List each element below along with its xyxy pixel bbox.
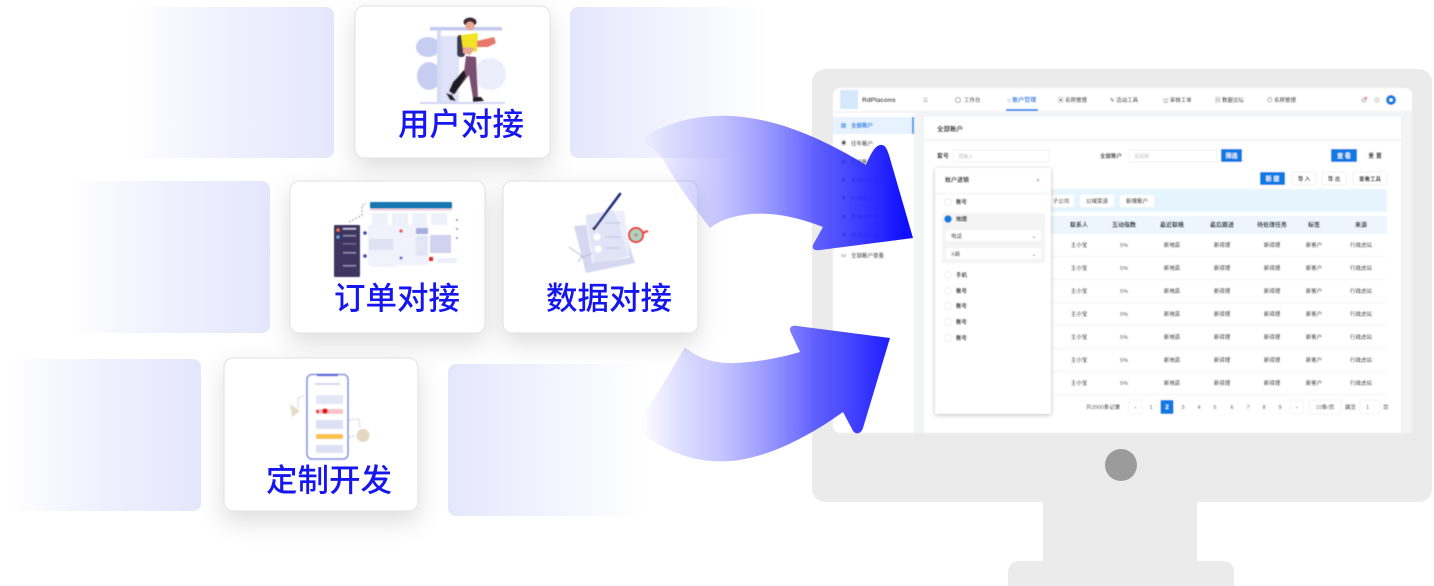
filter row: 筛选 [1225,152,1238,160]
filter row: 重 置 [1368,152,1382,160]
table rows: 主小宝 [1071,264,1088,272]
table header: 标签 [1308,221,1320,229]
sidebar: 费用进行中 [851,213,879,221]
table rows: 行政虎站 [1350,379,1372,387]
dropdown panel: ⌄ [1032,234,1036,240]
icon: mobile phone [290,374,370,459]
table rows: 新得理 [1214,379,1231,387]
monitor camera dot [1105,449,1137,481]
label: 订单对接: 订单对接 [334,280,460,316]
action buttons [1260,172,1387,185]
dropdown panel: 账号 [956,334,968,342]
table rows: 新地质 [1164,310,1181,318]
top navigation bar: ☰ [923,97,928,104]
table header: 最后跟进 [1210,221,1234,229]
table rows: 行政虎站 [1350,310,1372,318]
arrow: bottom [634,326,890,461]
panel heading: 全部账户 [937,124,963,133]
pagination: ‹ [1135,405,1137,411]
pagination: 5 [1213,405,1217,411]
tag band: 新增账户 [1126,197,1148,205]
table rows: 新客户 [1306,264,1322,272]
top navigation bar: ▣ 名称管理 [1058,96,1088,104]
dropdown panel: ⌄ [1032,252,1036,258]
filter row: 请输入 [958,153,973,160]
tag band: 公域渠道 [1086,197,1108,205]
table header: 互动指数 [1112,221,1136,229]
table rows: 新得理 [1264,241,1281,249]
dropdown panel: 账号 [956,198,968,206]
table rows: 新得理 [1264,333,1281,341]
table rows: 行政虎站 [1350,241,1372,249]
sidebar [833,113,914,433]
filter row: 套号 [937,152,949,160]
pagination: › [1296,405,1298,411]
pagination: 页 [1383,404,1389,411]
filter row: 查 看 [1337,152,1351,160]
table rows: 新地质 [1164,241,1181,249]
action buttons: 新 建 [1266,175,1279,183]
table rows: 新客户 [1306,333,1322,341]
table rows: 主小宝 [1071,310,1088,318]
table rows: 新得理 [1214,333,1231,341]
top navigation bar: ⌂ 账户管理 [1007,96,1036,104]
table rows: 5% [1120,335,1128,341]
top navigation bar [833,88,1412,111]
table header: 待处理任务 [1257,221,1287,229]
sidebar: 往年账户 [851,140,873,148]
sidebar: ◉ [841,140,847,147]
filter row [937,149,1382,162]
table rows: 主小宝 [1071,356,1088,364]
screen: dashboard [833,88,1412,433]
dropdown panel: 账户进销 [945,176,969,184]
table rows: 新得理 [1264,356,1281,364]
table rows: 主小宝 [1071,379,1088,387]
ghost panel: row 2 left [70,181,270,333]
table rows [937,241,1387,394]
table header: 联系人 [1070,221,1088,229]
table rows: 新得理 [1214,310,1231,318]
table rows: 主小宝 [1071,287,1088,295]
table rows: 新得理 [1264,310,1281,318]
card: 用户对接 [355,6,550,158]
table rows: 新得理 [1264,287,1281,295]
sidebar: 常用账户 [851,158,873,166]
table rows: 新地质 [1164,379,1181,387]
dropdown panel: 账号 [956,302,968,310]
table rows: 5% [1120,312,1128,318]
sidebar: ◉ [841,195,847,202]
pagination: 4 [1197,405,1201,411]
ghost panel: row 3 left [10,359,201,511]
table header: 最近联络 [1160,221,1184,229]
sidebar: ◉ [841,232,847,239]
sidebar: ▭ [841,253,847,259]
ghost panel: row 1 right [570,7,770,158]
top navigation bar: ◎ 名称管理 [1267,96,1297,104]
tag band: 子公司 [1053,198,1069,205]
pagination: 9 [1278,405,1282,411]
pagination: 共2000条记录 [1086,403,1121,411]
action buttons: 导 出 [1328,175,1340,183]
label: 定制开发: 定制开发 [266,462,392,498]
top navigation bar: RdPlacons [862,97,896,104]
pagination [1086,400,1389,414]
table rows: 新得理 [1264,264,1281,272]
arrow: top [640,116,913,250]
table rows: 新地质 [1164,356,1181,364]
pagination: 1 [1366,405,1369,411]
monitor stand [1043,500,1197,563]
monitor body [812,69,1432,502]
sidebar: 全部账户 [851,122,873,130]
action buttons: 导 入 [1298,176,1311,183]
table rows: 新客户 [1306,241,1322,249]
monitor [812,69,1432,586]
table rows: 新客户 [1306,379,1322,387]
dropdown panel: 手机 [956,271,968,279]
dropdown panel [935,168,1051,414]
sidebar: ◉ [841,214,847,221]
table rows: 新得理 [1214,241,1231,249]
table rows: 新地质 [1164,333,1181,341]
dropdown panel: 账号 [956,287,968,295]
table rows: 新客户 [1306,287,1322,295]
sidebar: 费用进行中 [851,232,879,240]
label: 用户对接: 用户对接 [398,106,524,142]
sidebar: ◉ [841,159,847,166]
pagination: 10条/页 [1316,403,1335,411]
top navigation bar: ▤ 数据论坛 [1215,96,1245,104]
sidebar: ◉ [841,177,847,184]
sidebar: 全部账户查看 [851,252,885,260]
dropdown panel: 地理 [956,215,968,223]
table rows: 5% [1120,381,1128,387]
pagination: 8 [1262,405,1266,411]
pagination: 6 [1230,405,1234,411]
pagination: 跳至 [1345,403,1357,411]
table rows: 新得理 [1214,264,1231,272]
icon: order board [334,202,458,277]
table header: 来源 [1355,221,1367,229]
pagination: 1 [1149,405,1153,411]
sidebar: 已审账户 [851,194,873,202]
ghost panel: row 3 right [448,364,648,516]
main content panel [924,117,1401,433]
monitor base [1008,561,1234,586]
table rows: 新客户 [1306,310,1322,318]
table rows: 新客户 [1306,356,1322,364]
dropdown panel: 账号 [956,318,968,326]
tag band [937,189,1387,212]
table header [937,216,1387,234]
table rows: 5% [1120,243,1128,249]
pagination: 2 [1165,405,1169,411]
label: 数据对接: 数据对接 [546,280,672,316]
dropdown panel: X商 [951,250,961,258]
table rows: 行政虎站 [1350,287,1372,295]
table rows: 新地质 [1164,264,1181,272]
pagination: 3 [1181,405,1185,411]
sidebar: 费用进行中 [851,176,879,184]
table rows: 5% [1120,266,1128,272]
ghost panel: row 1 left [130,7,334,158]
table rows: 新得理 [1264,379,1281,387]
table rows: 5% [1120,289,1128,295]
table rows: 主小宝 [1071,241,1088,249]
table rows: 行政虎站 [1350,264,1372,272]
table rows: 5% [1120,358,1128,364]
top navigation bar: ◫ 审核工单 [1163,96,1192,104]
filter row: 请选择 [1134,153,1149,160]
card: 数据对接 [503,181,698,333]
icon: walking person [416,18,506,104]
top navigation bar: 工作台 [964,96,981,104]
dropdown panel: × [1036,178,1040,184]
table rows: 新地质 [1164,287,1181,295]
table rows: 主小宝 [1071,333,1088,341]
table rows: 新得理 [1214,356,1231,364]
icon: documents and pen [569,194,648,273]
top navigation bar: ✎ 活动工具 [1110,96,1139,104]
table rows: 新得理 [1214,287,1231,295]
filter row: 全部账户 [1100,152,1122,160]
table rows: 行政虎站 [1350,356,1372,364]
dropdown panel: 电话 [951,232,963,240]
card: 定制开发 [224,358,418,511]
pagination: 7 [1246,405,1250,411]
card: 订单对接 [290,181,485,333]
action buttons: 查看工具 [1359,175,1381,183]
table rows: 行政虎站 [1350,333,1372,341]
